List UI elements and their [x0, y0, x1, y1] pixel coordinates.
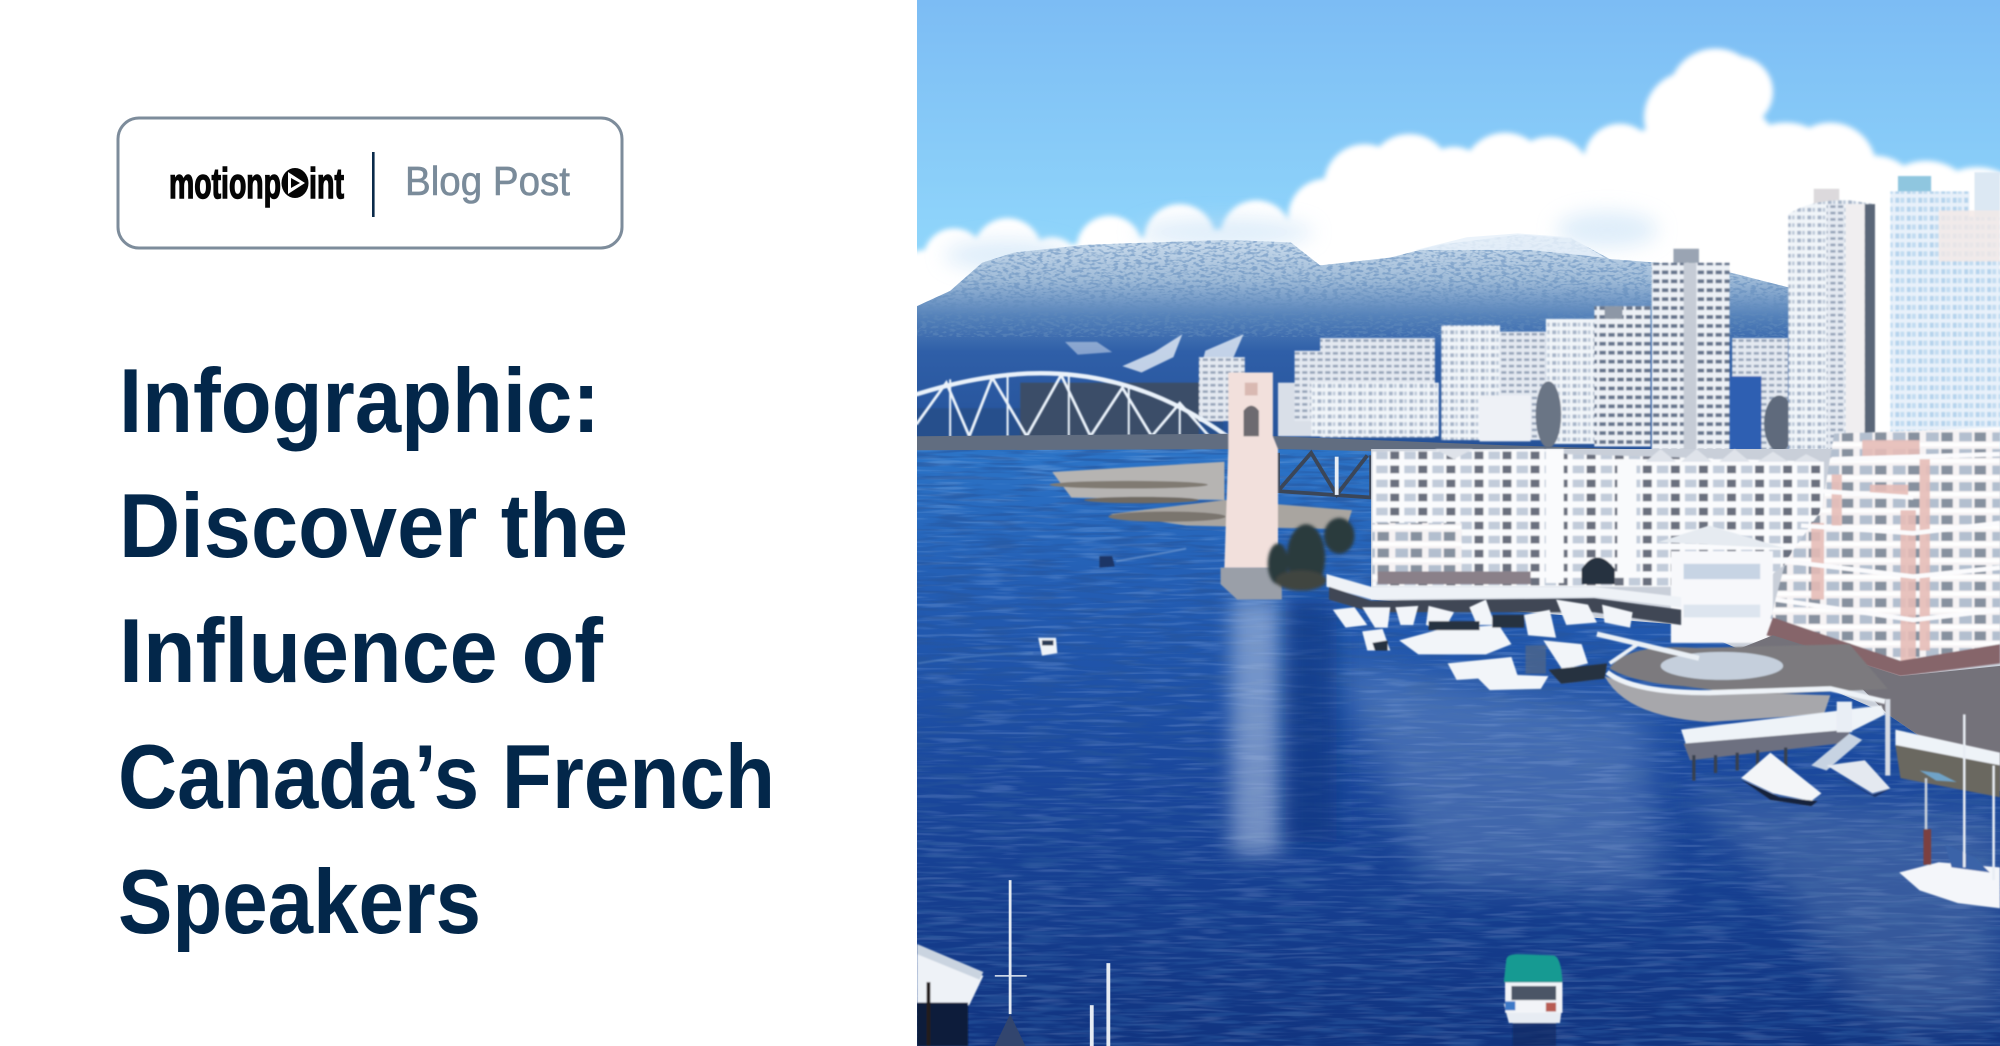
badge outline — [118, 118, 622, 248]
covered boats at pier — [1741, 753, 1957, 806]
right shore reflection — [1684, 791, 2000, 1020]
curved walkway — [1597, 634, 1888, 722]
shoals under bridge — [1050, 462, 1352, 529]
shore promenade — [1735, 635, 2000, 791]
snowy mountain peak haze — [1416, 233, 1605, 258]
small boats on water — [918, 549, 1186, 663]
pier walkway — [1681, 699, 2000, 797]
arch passage — [1582, 557, 1615, 584]
title: Influence of — [119, 601, 604, 702]
tower: right glass high-rises — [1890, 172, 2000, 440]
left panel: badge and title — [116, 116, 775, 953]
deep shadow — [1286, 600, 1337, 842]
pink terraced apartments — [1767, 427, 2000, 676]
title — [118, 351, 775, 953]
title: Speakers — [118, 852, 481, 953]
title: Canada’s French — [118, 727, 775, 828]
sailboat right — [1899, 714, 2000, 908]
bridge deck — [917, 434, 1824, 464]
pier reflection — [1231, 600, 1282, 855]
bottom-left moored boat — [917, 944, 983, 1046]
marina boats — [1333, 600, 1633, 690]
bridge truss — [1278, 453, 1371, 497]
title: Discover the — [119, 476, 628, 577]
teal ferry — [1504, 954, 1562, 1046]
cloud shading — [944, 212, 1658, 270]
logo: motionpoint wordmark: int — [309, 160, 344, 208]
badge label: Blog Post — [405, 158, 571, 204]
dormers — [1435, 449, 1821, 462]
skyline: background towers — [917, 306, 1795, 453]
photo: Vancouver False Creek skyline — [917, 0, 2000, 1046]
logo: motionpoint wordmark: motionp — [169, 160, 281, 208]
boardwalk — [1326, 574, 1681, 625]
ripples — [917, 449, 2000, 1046]
bridge arch — [917, 373, 1227, 436]
title: Infographic: — [119, 351, 600, 452]
clouds — [891, 48, 2000, 459]
waterfront white apartments — [1372, 449, 1824, 587]
tower: centre high-rise — [1652, 249, 1730, 450]
sky — [917, 0, 2000, 459]
badge divider — [372, 152, 375, 217]
low white pavilion — [1658, 526, 1786, 643]
water — [917, 449, 2000, 1046]
badge: motionpoint blog post — [118, 118, 622, 248]
masts at bottom-left — [995, 880, 1108, 1046]
trees at pier base — [1268, 518, 1355, 591]
forest texture on slopes — [917, 235, 1797, 337]
land behind waterfront — [1371, 449, 2000, 791]
mountains — [917, 235, 1801, 459]
snow patches on slope — [1065, 334, 1244, 376]
tower: rounded high-rise — [1788, 189, 1875, 453]
bridge pier tower — [1221, 372, 1282, 600]
marina reflection — [1333, 663, 1658, 893]
